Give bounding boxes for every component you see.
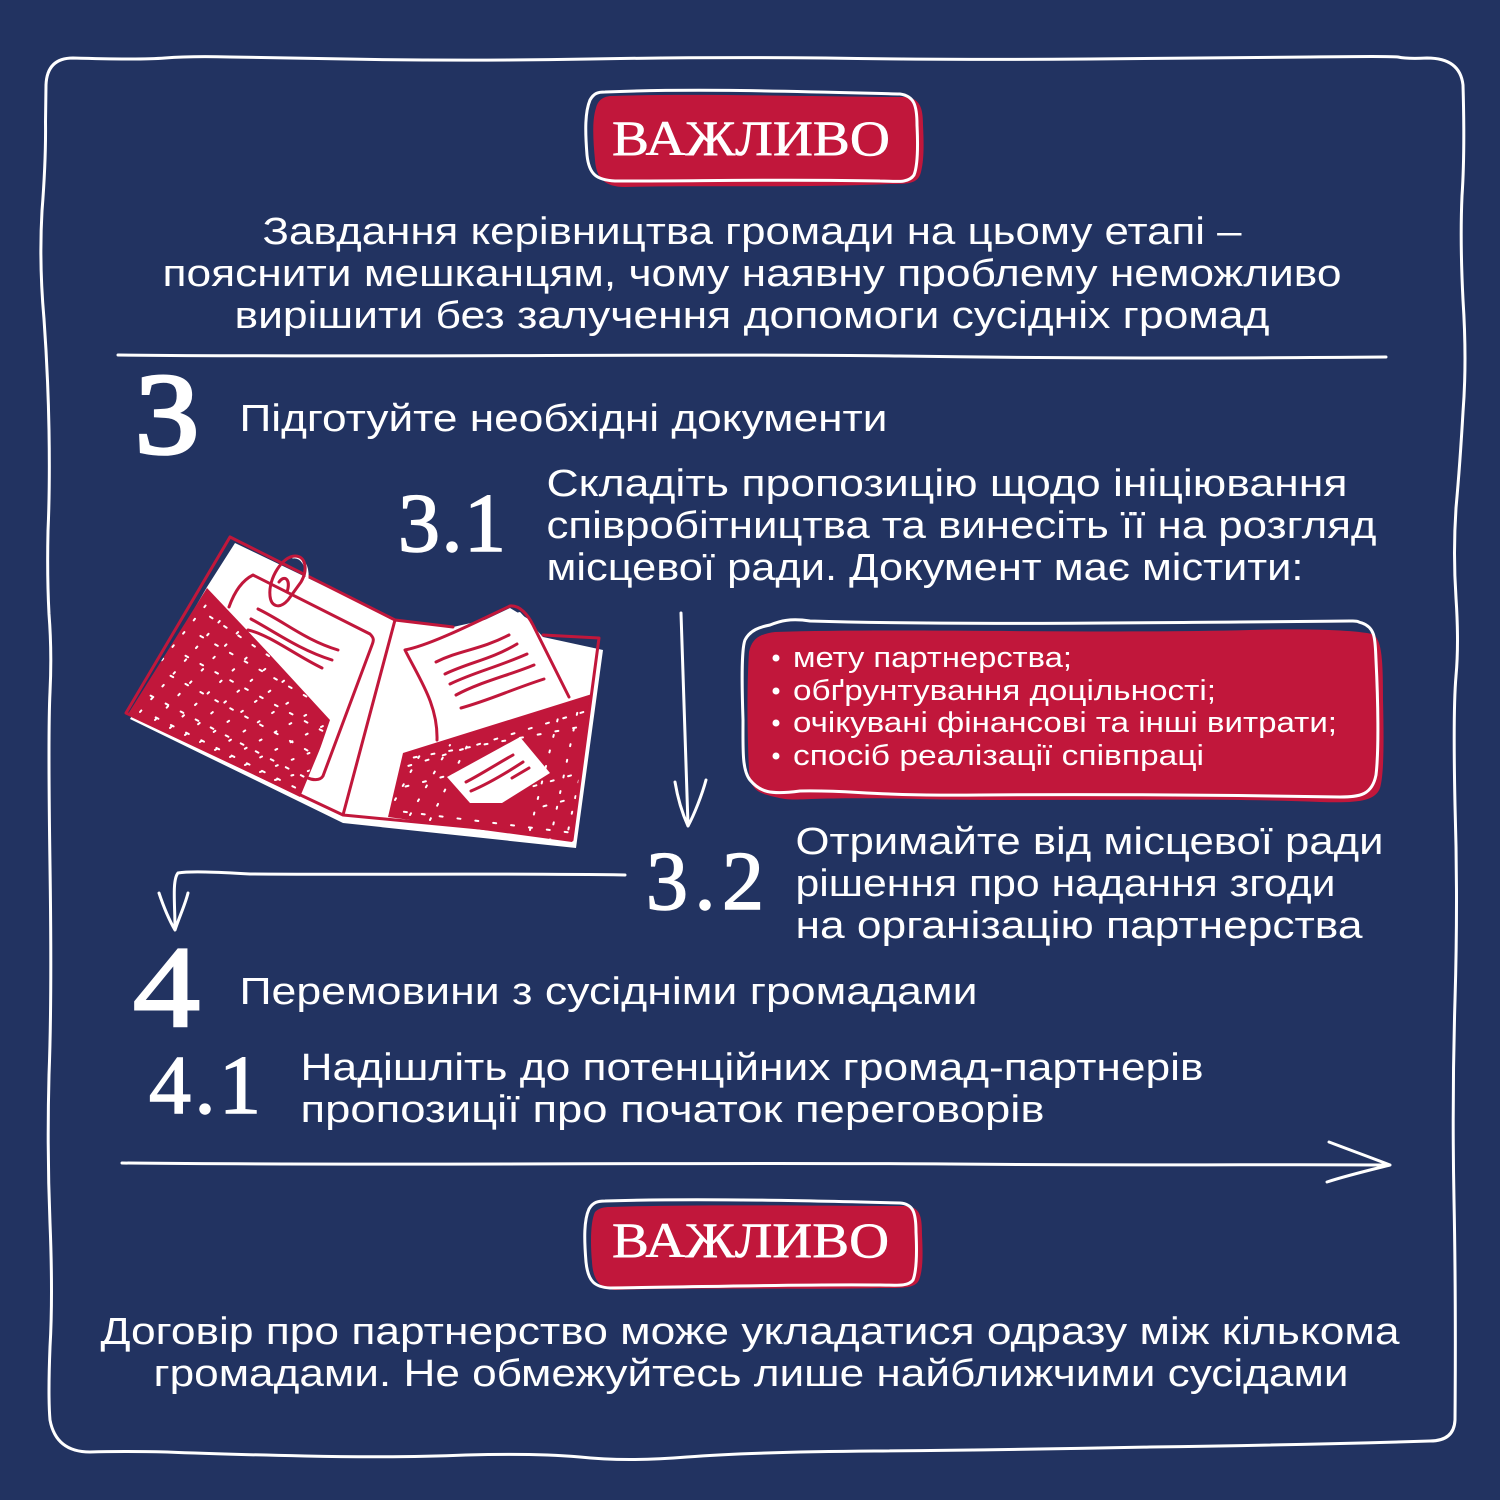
- badge: important top: [586, 90, 924, 187]
- folder outline and clip: [126, 537, 599, 840]
- badge: important top: ВАЖЛИВО: [612, 110, 890, 166]
- folder sheet: [130, 543, 603, 848]
- text block: task of community leadership: вирішити без залучення допомоги сусідніх громад: [234, 295, 1270, 337]
- text block: task of community leadership: [162, 211, 1342, 337]
- left pocket scribble: [128, 588, 332, 797]
- callout: document contents: очікувані фінансові та інші витрати;: [793, 707, 1337, 739]
- right pocket scribble: [388, 694, 592, 845]
- note in right pocket: [447, 737, 550, 803]
- badge: important bottom: [585, 1200, 923, 1290]
- illustration: folder with documents: [126, 537, 603, 848]
- arrow: long horizontal: [122, 1142, 1390, 1182]
- step 3.2 text: Отримайте від місцевої ради: [796, 821, 1384, 863]
- step 3.1 number: 3.1: [398, 477, 506, 570]
- step 4.1 text: Надішліть до потенційних громад-партнерів: [300, 1047, 1204, 1089]
- text block: task of community leadership: Завдання керівництва громади на цьому етапі –: [262, 211, 1242, 253]
- text block: partnership note: [100, 1311, 1401, 1395]
- loose document: [405, 608, 570, 740]
- step 4 number: 4: [133, 924, 200, 1052]
- step 3 heading: Підготуйте необхідні документи: [240, 398, 888, 440]
- step 3.1 text: співробітництва та винесіть її на розгляд: [546, 505, 1376, 547]
- text block: task of community leadership: пояснити мешканцям, чому наявну проблему неможливо: [162, 253, 1342, 295]
- step 3.2 text: рішення про надання згоди: [796, 863, 1336, 905]
- callout: document contents: спосіб реалізації співпраці: [793, 740, 1204, 772]
- clipped document: [229, 575, 373, 780]
- step 3.2 text: [796, 821, 1384, 947]
- step 4 heading: Перемовини з сусідніми громадами: [240, 971, 978, 1013]
- callout: document contents: мету партнерства;: [793, 642, 1072, 674]
- step 3.2 number: 3.2: [646, 835, 764, 928]
- step 3 number: 3: [135, 351, 199, 479]
- step 4.1 text: [300, 1047, 1204, 1131]
- arrow: 3.1 to 3.2: [675, 613, 706, 826]
- text block: partnership note: громадами. Не обмежуйтесь лише найближчими сусідами: [154, 1353, 1348, 1395]
- step 4.1 text: пропозиції про початок переговорів: [300, 1089, 1044, 1131]
- callout: document contents: обґрунтування доцільності;: [793, 675, 1216, 707]
- text block: partnership note: Договір про партнерство може укладатися одразу між кількома: [100, 1311, 1401, 1353]
- arrow: 3.2 to 4: [159, 872, 625, 930]
- step 4.1 number: 4.1: [149, 1039, 261, 1132]
- badge: important bottom: ВАЖЛИВО: [612, 1212, 889, 1268]
- step 3.1 text: Складіть пропозицію щодо ініціювання: [546, 463, 1348, 505]
- step 3.1 text: місцевої ради. Документ має містити:: [546, 547, 1304, 589]
- step 3.2 text: на організацію партнерства: [796, 905, 1363, 947]
- step 3.1 text: [546, 463, 1376, 589]
- callout: document contents: [742, 620, 1384, 802]
